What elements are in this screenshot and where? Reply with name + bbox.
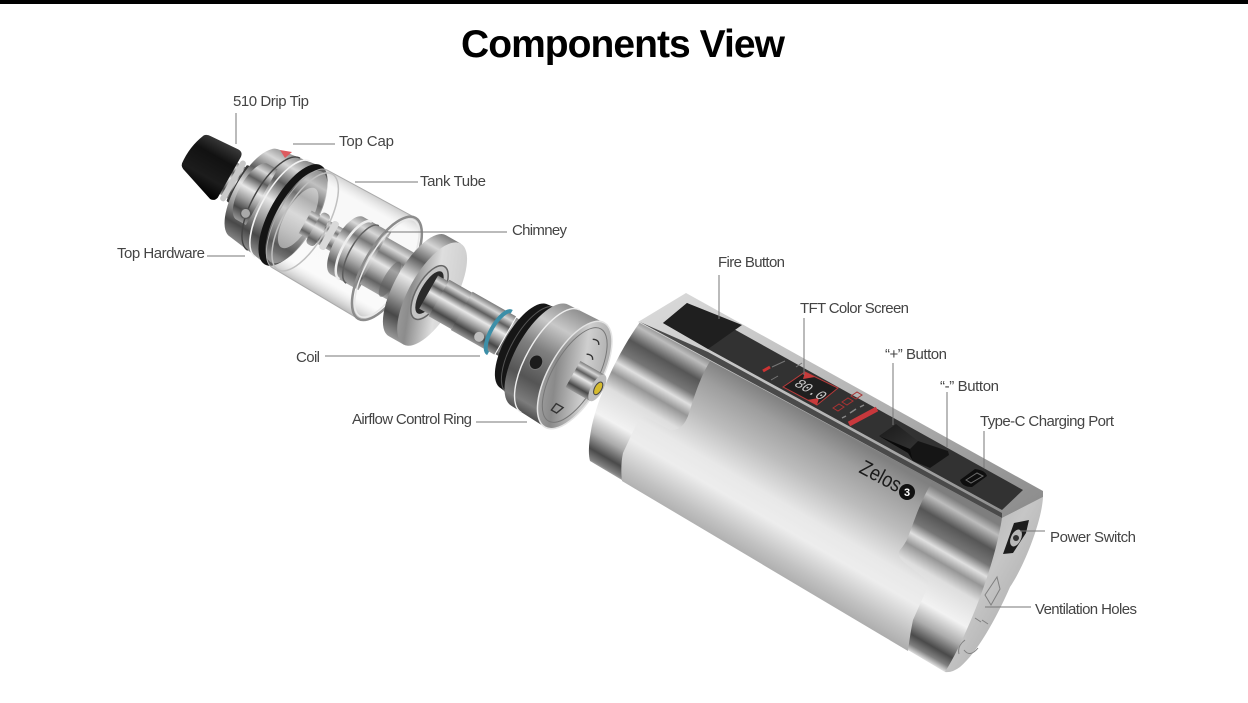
power switch (1003, 520, 1029, 554)
dark seam under top panel (640, 322, 1002, 518)
icon: 510 drip tip (173, 128, 243, 202)
logo: Zelos (856, 456, 905, 497)
label: Fire Button (718, 254, 785, 319)
icon: neck rings (209, 153, 271, 217)
flange base plate (370, 224, 481, 356)
label: plus button: “+” Button (885, 346, 947, 363)
fire button (663, 303, 742, 349)
510 thread post (566, 361, 605, 401)
label: Coil: Coil (296, 349, 320, 366)
icon: red arrow mark on top cap (280, 150, 292, 158)
face markings (551, 338, 602, 416)
type-C charging port (960, 469, 987, 487)
icon: fill hole (239, 207, 252, 220)
black o-ring of top hardware (245, 154, 341, 276)
top black bar (0, 0, 1248, 4)
end cap face (945, 497, 1043, 672)
tank tube (252, 158, 436, 331)
label: Type-C Charging Port (980, 413, 1115, 468)
label: minus button (940, 378, 999, 447)
black top panel (663, 303, 1023, 510)
top rim (638, 293, 1043, 518)
label: Top Hardware (117, 245, 245, 262)
label: Top Cap: Top Cap (339, 133, 394, 150)
label: plus button (885, 346, 947, 425)
ventilation holes and end-cap markings (959, 577, 1000, 654)
label: Airflow Control Ring: Airflow Control Ring (352, 411, 472, 428)
label: Top Cap (293, 133, 394, 150)
label: minus button: “-” Button (940, 378, 999, 395)
title: Components View (461, 23, 786, 66)
label: TFT Color Screen (800, 300, 909, 375)
air hole (527, 353, 545, 372)
coil (417, 271, 535, 367)
label: Ventilation Holes: Ventilation Holes (1035, 601, 1137, 618)
label: Tank Tube: Tank Tube (420, 173, 486, 190)
label: TFT Color Screen: TFT Color Screen (800, 300, 909, 317)
label: Fire Button: Fire Button (718, 254, 785, 271)
label: Tank Tube (355, 173, 486, 190)
blue o-ring (480, 307, 512, 353)
top hardware (210, 135, 321, 264)
matte centre panel (621, 358, 932, 651)
logo: 3 (904, 487, 910, 499)
mod body (589, 293, 1043, 672)
label: 510 Drip Tip (233, 93, 309, 144)
plus and minus buttons (879, 424, 949, 468)
chrome body shell (589, 322, 1002, 672)
label: Chimney: Chimney (512, 222, 568, 239)
label: Top Hardware: Top Hardware (117, 245, 205, 262)
label: Power Switch: Power Switch (1050, 529, 1136, 546)
airflow control ring (477, 284, 632, 443)
TFT color screen: 80.0 (789, 378, 830, 404)
chimney (270, 182, 428, 312)
tank atomizer assembly (157, 102, 632, 443)
label: Type-C Charging Port: Type-C Charging Port (980, 413, 1115, 430)
TFT color screen (763, 361, 877, 424)
label: 510 Drip Tip: 510 Drip Tip (233, 93, 309, 110)
